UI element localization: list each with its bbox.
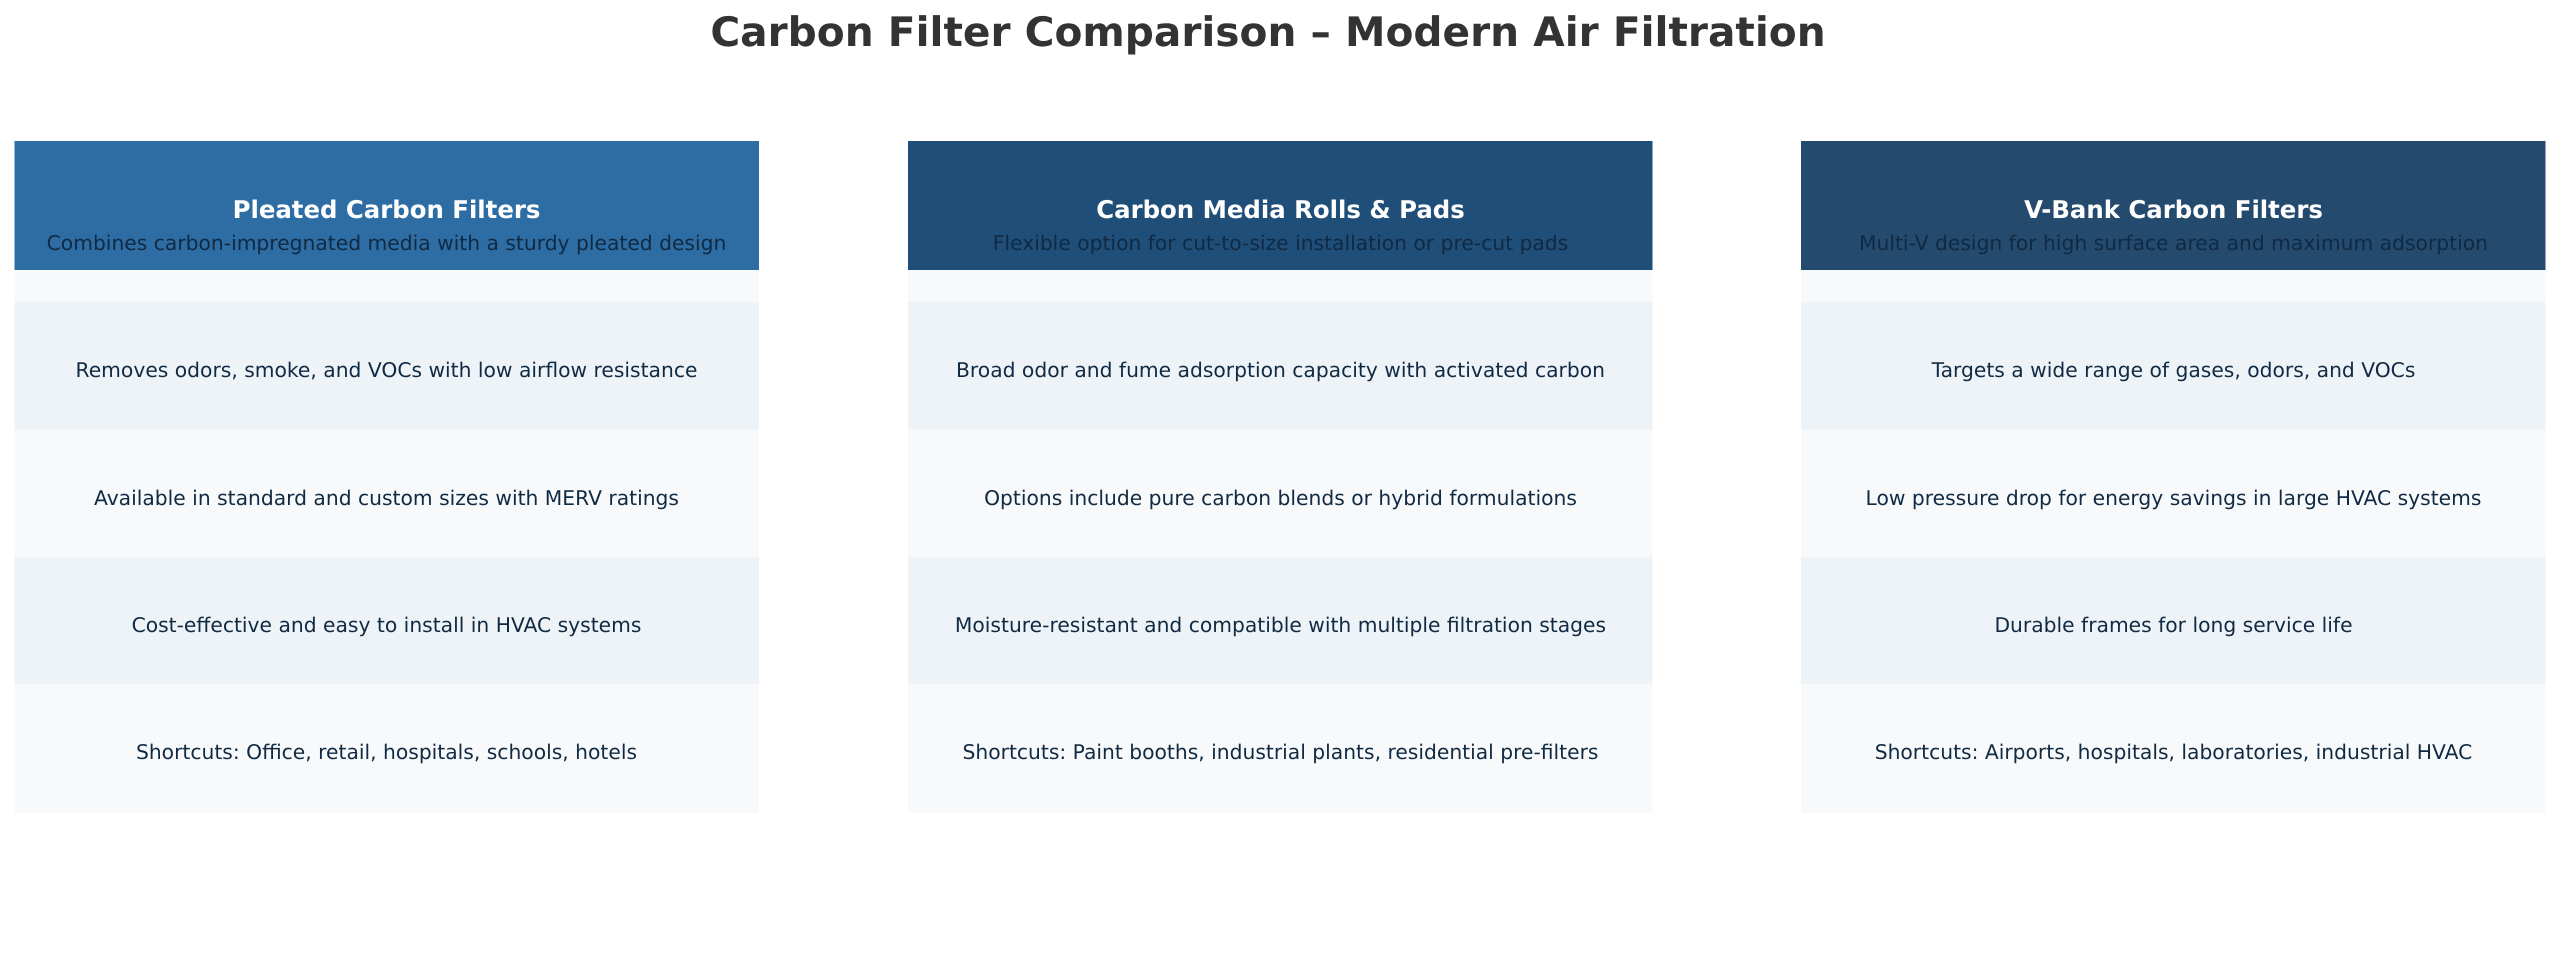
header band: v-bank — [1801, 141, 2546, 270]
row 1 text: v-bank: Targets a wide range of gases, odors, and VOCs — [1931, 358, 2415, 382]
row 3 background: media rolls — [908, 557, 1652, 684]
row 4 text: pleated: Shortcuts: Office, retail, hospitals, schools, hotels — [136, 740, 637, 764]
row 1 background: pleated — [14, 302, 759, 430]
row 1 background: v-bank — [1801, 302, 2546, 430]
row 2 text: pleated: Available in standard and custom sizes with MERV ratings — [94, 486, 679, 510]
heading: media rolls: Carbon Media Rolls & Pads — [1096, 195, 1465, 224]
heading: pleated: Pleated Carbon Filters — [233, 195, 540, 224]
row 3 text: pleated: Cost-effective and easy to install in HVAC systems — [132, 613, 641, 637]
description: v-bank: Multi-V design for high surface area and maximum adsorption — [1859, 231, 2488, 255]
title: Carbon Filter Comparison – Modern Air Filtration — [710, 8, 1826, 56]
description: media rolls: Flexible option for cut-to-size installation or pre-cut pads — [993, 231, 1568, 255]
row 1 background: media rolls — [908, 302, 1652, 430]
panel: carbon media rolls and pads — [908, 141, 1652, 813]
row 4 text: media rolls: Shortcuts: Paint booths, industrial plants, residential pre-filters — [963, 740, 1598, 764]
row 3 background: v-bank — [1801, 557, 2546, 684]
spacer row: media rolls — [908, 270, 1652, 302]
spacer row: v-bank — [1801, 270, 2546, 302]
panel: pleated carbon filters — [14, 141, 759, 813]
row 4 background: v-bank — [1801, 684, 2546, 813]
row 4 background: media rolls — [908, 684, 1652, 813]
row 2 background: media rolls — [908, 430, 1652, 557]
heading: v-bank: V-Bank Carbon Filters — [2024, 195, 2323, 224]
row 3 text: v-bank: Durable frames for long service life — [1994, 613, 2353, 637]
description: pleated: Combines carbon-impregnated media with a sturdy pleated design — [47, 231, 726, 255]
row 4 text: v-bank: Shortcuts: Airports, hospitals, laboratories, industrial HVAC — [1875, 740, 2472, 764]
row 3 background: pleated — [14, 557, 759, 684]
row 2 text: v-bank: Low pressure drop for energy savings in large HVAC systems — [1866, 486, 2481, 510]
row 3 text: media rolls: Moisture-resistant and compatible with multiple filtration stages — [955, 613, 1606, 637]
spacer row: pleated — [14, 270, 759, 302]
row 1 text: pleated: Removes odors, smoke, and VOCs with low airflow resistance — [76, 358, 697, 382]
row 1 text: media rolls: Broad odor and fume adsorption capacity with activated carbon — [956, 358, 1605, 382]
header band: pleated — [14, 141, 759, 270]
row 2 background: pleated — [14, 430, 759, 557]
panel: v-bank carbon filters — [1801, 141, 2546, 813]
row 2 background: v-bank — [1801, 430, 2546, 557]
row 4 background: pleated — [14, 684, 759, 813]
row 2 text: media rolls: Options include pure carbon blends or hybrid formulations — [984, 486, 1577, 510]
header band: media rolls — [908, 141, 1652, 270]
